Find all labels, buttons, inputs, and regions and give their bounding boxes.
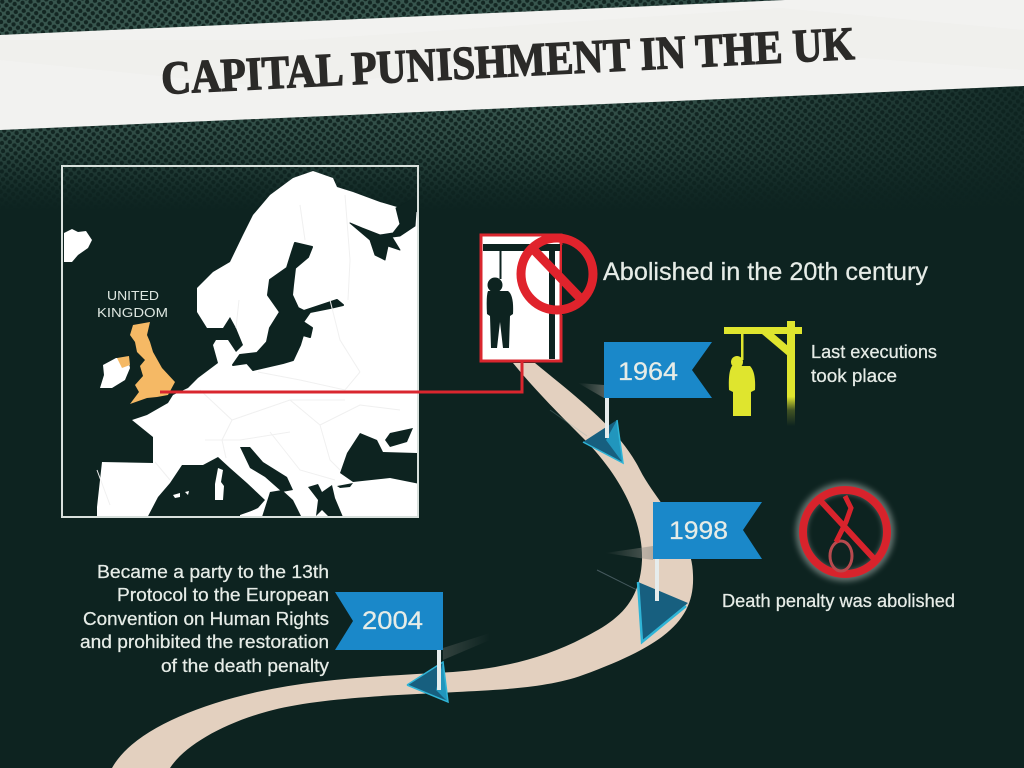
aegean sea xyxy=(308,484,342,516)
great britain xyxy=(130,322,175,404)
corsica and sardinia xyxy=(215,468,224,500)
heading: abolished: Abolished in the 20th century xyxy=(603,258,929,286)
country borders xyxy=(97,195,400,505)
connector line xyxy=(160,361,522,392)
northern ireland xyxy=(117,356,130,368)
text: 13th protocol: and prohibited the restoration xyxy=(80,632,329,652)
adriatic sea xyxy=(240,447,293,492)
text: last executions: took place xyxy=(811,366,897,386)
black sea xyxy=(340,433,420,484)
marker: 1964 xyxy=(550,342,712,463)
marker: 1964: 1964 xyxy=(618,358,678,386)
label: United Kingdom: UNITED xyxy=(107,288,159,303)
marker: 1998 xyxy=(597,502,762,642)
icon: crossed noose xyxy=(801,488,889,576)
balearic islands xyxy=(173,491,189,498)
icon: yellow gallows xyxy=(724,321,802,426)
text: 13th protocol: Protocol to the European xyxy=(117,585,329,605)
ireland xyxy=(100,358,130,388)
baltic sea xyxy=(233,243,343,370)
sicily xyxy=(240,510,254,516)
mediterranean sea xyxy=(146,457,265,520)
text: 13th protocol: Became a party to the 13th xyxy=(97,562,329,582)
label: United Kingdom: KINGDOM xyxy=(97,305,168,320)
text: last executions: Last executions xyxy=(811,342,937,362)
marker: 2004: 2004 xyxy=(362,607,423,635)
ionian sea xyxy=(262,490,301,516)
continental land xyxy=(97,171,420,520)
marker: 2004 xyxy=(335,592,490,702)
road xyxy=(112,363,693,768)
text: 13th protocol: Convention on Human Rights xyxy=(83,609,329,629)
title banner xyxy=(0,0,1024,130)
sea of azov xyxy=(385,428,413,447)
marker: 1998: 1998 xyxy=(669,517,728,545)
title: CAPITAL PUNISHMENT IN THE UK xyxy=(160,18,856,105)
icon: gallows with prohibition xyxy=(481,235,593,361)
panel: Europe map xyxy=(62,166,421,520)
iceland xyxy=(64,229,92,262)
text: death penalty abolished: Death penalty was abolished xyxy=(722,591,955,611)
marmara sea xyxy=(337,483,353,488)
map frame xyxy=(62,166,418,517)
text: 13th protocol: of the death penalty xyxy=(161,656,329,676)
white sea xyxy=(350,204,417,260)
